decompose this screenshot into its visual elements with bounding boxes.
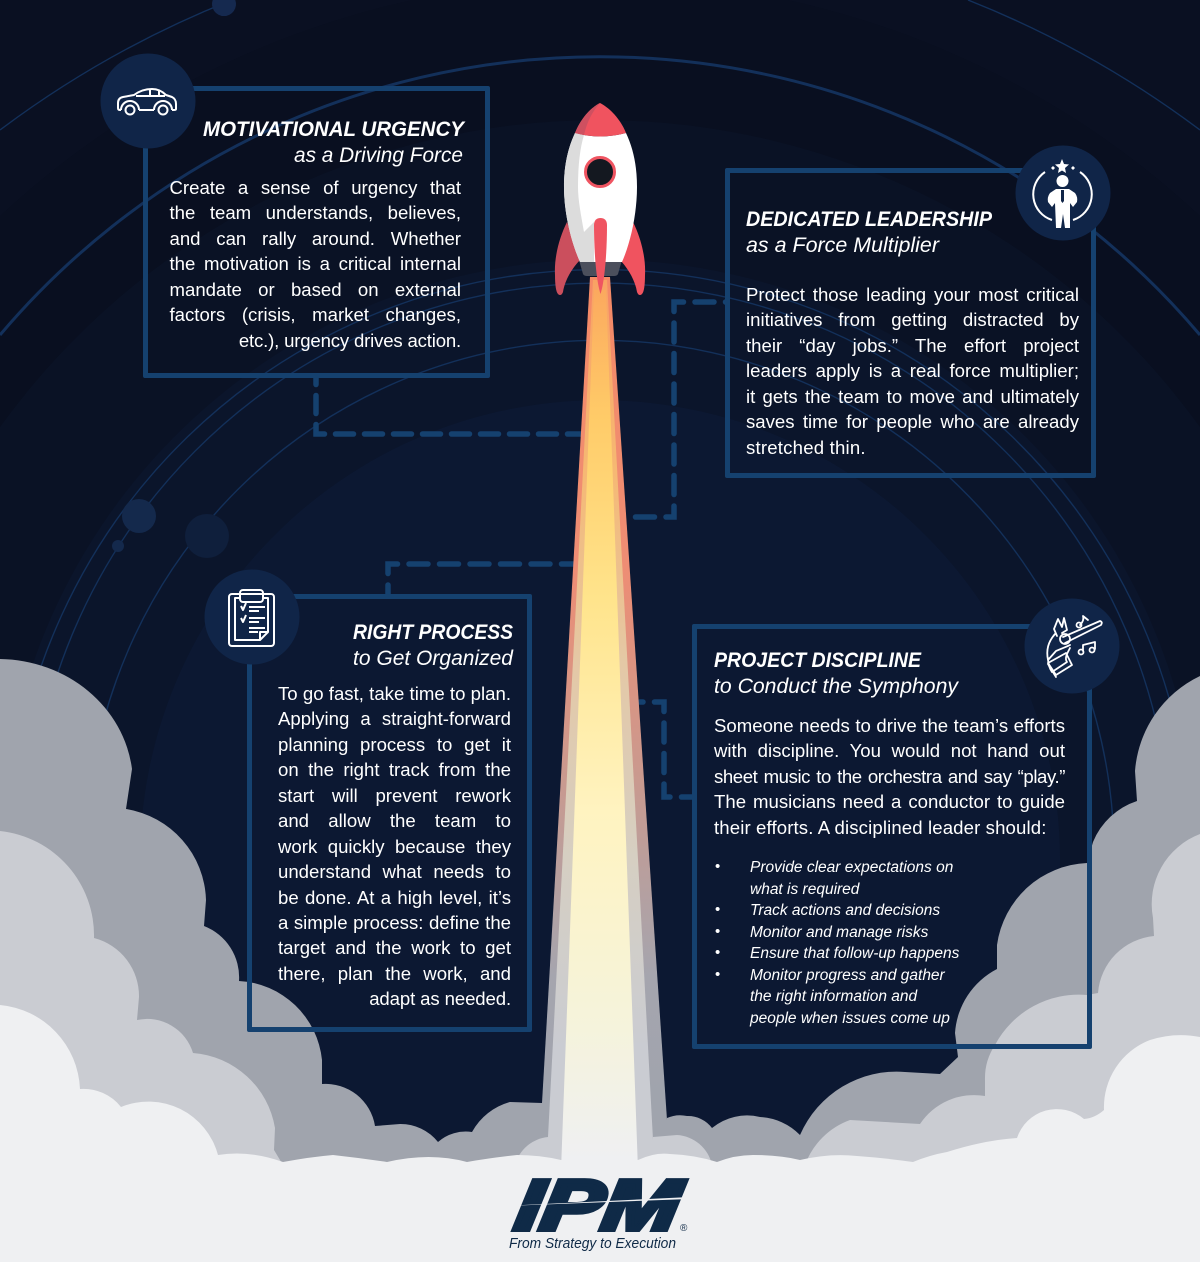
heading: PROJECT DISCIPLINE [714, 648, 922, 672]
exhaust outer band [542, 277, 667, 1180]
heading [714, 648, 959, 698]
body text: and allow the team to [278, 810, 511, 831]
panel border [247, 594, 532, 1032]
body text [714, 715, 1065, 838]
nose cone [575, 103, 626, 136]
body text: leaders apply is a real force multiplier; [746, 360, 1079, 381]
bullet markers: • [715, 923, 720, 940]
body text: etc.), urgency drives action. [239, 330, 461, 351]
body text: planning process to get it [278, 734, 511, 755]
bullet list: Provide clear expectations on [750, 859, 953, 876]
registered mark: ® [680, 1223, 688, 1234]
heading: as a Driving Force [294, 143, 463, 167]
panel border [692, 624, 1092, 1049]
bullet list: Monitor progress and gather [750, 967, 945, 984]
body text: factors (crisis, market changes, [170, 304, 461, 325]
body text: Protect those leading your most critical [746, 284, 1079, 305]
body text: work quickly because they [278, 836, 511, 857]
icon: car [100, 54, 196, 148]
body text: start will prevent rework [278, 785, 511, 806]
body text: understand what needs to [278, 861, 511, 882]
body text: it gets the team to move and ultimately [746, 386, 1079, 407]
body text: The musicians need a conductor to guide [714, 791, 1065, 812]
bullet list: Ensure that follow-up happens [750, 945, 959, 962]
dark cloud layer [0, 659, 1200, 1262]
body text: Someone needs to drive the team’s efforts [714, 715, 1065, 736]
body text: with discipline. You would not hand out [714, 740, 1065, 761]
exhaust core flame [561, 290, 638, 1170]
tagline: From Strategy to Execution [509, 1236, 676, 1252]
panel: dedicated leadership [261, 146, 1110, 654]
centre fin [594, 218, 607, 294]
body text [746, 284, 1079, 458]
exhaust middle band [548, 280, 653, 1180]
heading: DEDICATED LEADERSHIP [746, 207, 993, 231]
panel border [725, 168, 1096, 478]
body text: initiatives from getting distracted by [746, 309, 1079, 330]
body text: a simple process: define the [278, 912, 511, 933]
mid cloud layer [0, 831, 283, 1262]
body text: the motivation is a critical internal [170, 253, 461, 274]
bullet markers: • [715, 901, 720, 918]
heading: to Conduct the Symphony [714, 674, 959, 698]
heading: RIGHT PROCESS [353, 620, 514, 644]
logo swoosh [503, 1197, 690, 1206]
bullet list: what is required [750, 881, 859, 898]
bullet markers [715, 858, 720, 983]
heading [353, 620, 514, 670]
body text: To go fast, take time to plan. [278, 683, 511, 704]
light cloud layer [0, 1005, 1200, 1262]
body text: on the right track from the [278, 759, 511, 780]
body text: target and the work to get [278, 937, 511, 958]
body text: be done. At a high level, it’s [278, 886, 511, 908]
body text: Create a sense of urgency that [170, 177, 461, 198]
body shadow [564, 133, 594, 262]
nozzle [579, 260, 622, 276]
panel: motivational urgency [100, 54, 1093, 654]
heading: to Get Organized [353, 646, 514, 670]
body text: there, plan the work, and [278, 963, 511, 984]
body text: saves time for people who are already [746, 411, 1079, 432]
body text: sheet music to the orchestra and say “play.” [714, 766, 1065, 787]
icon: leader [1016, 146, 1110, 240]
bullet markers: • [715, 966, 720, 983]
bullet markers: • [715, 944, 720, 961]
logo wordmark: IPM [510, 1166, 688, 1245]
body text: stretched thin. [746, 437, 866, 458]
body text: mandate or based on external [170, 279, 461, 300]
bullet list: Monitor and manage risks [750, 924, 928, 941]
heading: as a Force Multiplier [746, 233, 940, 257]
panel: right process [204, 570, 1092, 1032]
icon: conductor hand [1024, 598, 1120, 694]
bullet list: the right information and [750, 988, 917, 1005]
window [586, 158, 614, 186]
heading [746, 207, 993, 257]
icon: clipboard [204, 570, 300, 664]
body text: the team understands, believes, [170, 202, 461, 223]
bullet markers: • [715, 858, 720, 875]
panel border [143, 86, 490, 378]
bullet list: Track actions and decisions [750, 902, 940, 919]
body [564, 133, 637, 262]
left fin [555, 222, 581, 295]
bullet list [750, 859, 959, 1027]
heading: MOTIVATIONAL URGENCY [203, 117, 466, 141]
body text: their “day jobs.” The effort project [746, 335, 1079, 356]
right fin [619, 222, 645, 295]
body text: and can rally around. Whether [170, 228, 461, 249]
body text [170, 177, 461, 351]
body text [278, 683, 511, 1009]
heading [203, 117, 466, 167]
body text: adapt as needed. [369, 988, 511, 1009]
body text: their efforts. A disciplined leader should: [714, 817, 1046, 838]
bullet list: people when issues come up [750, 1010, 950, 1027]
body text: Applying a straight-forward [278, 708, 511, 729]
panel: project discipline [692, 598, 1120, 1049]
